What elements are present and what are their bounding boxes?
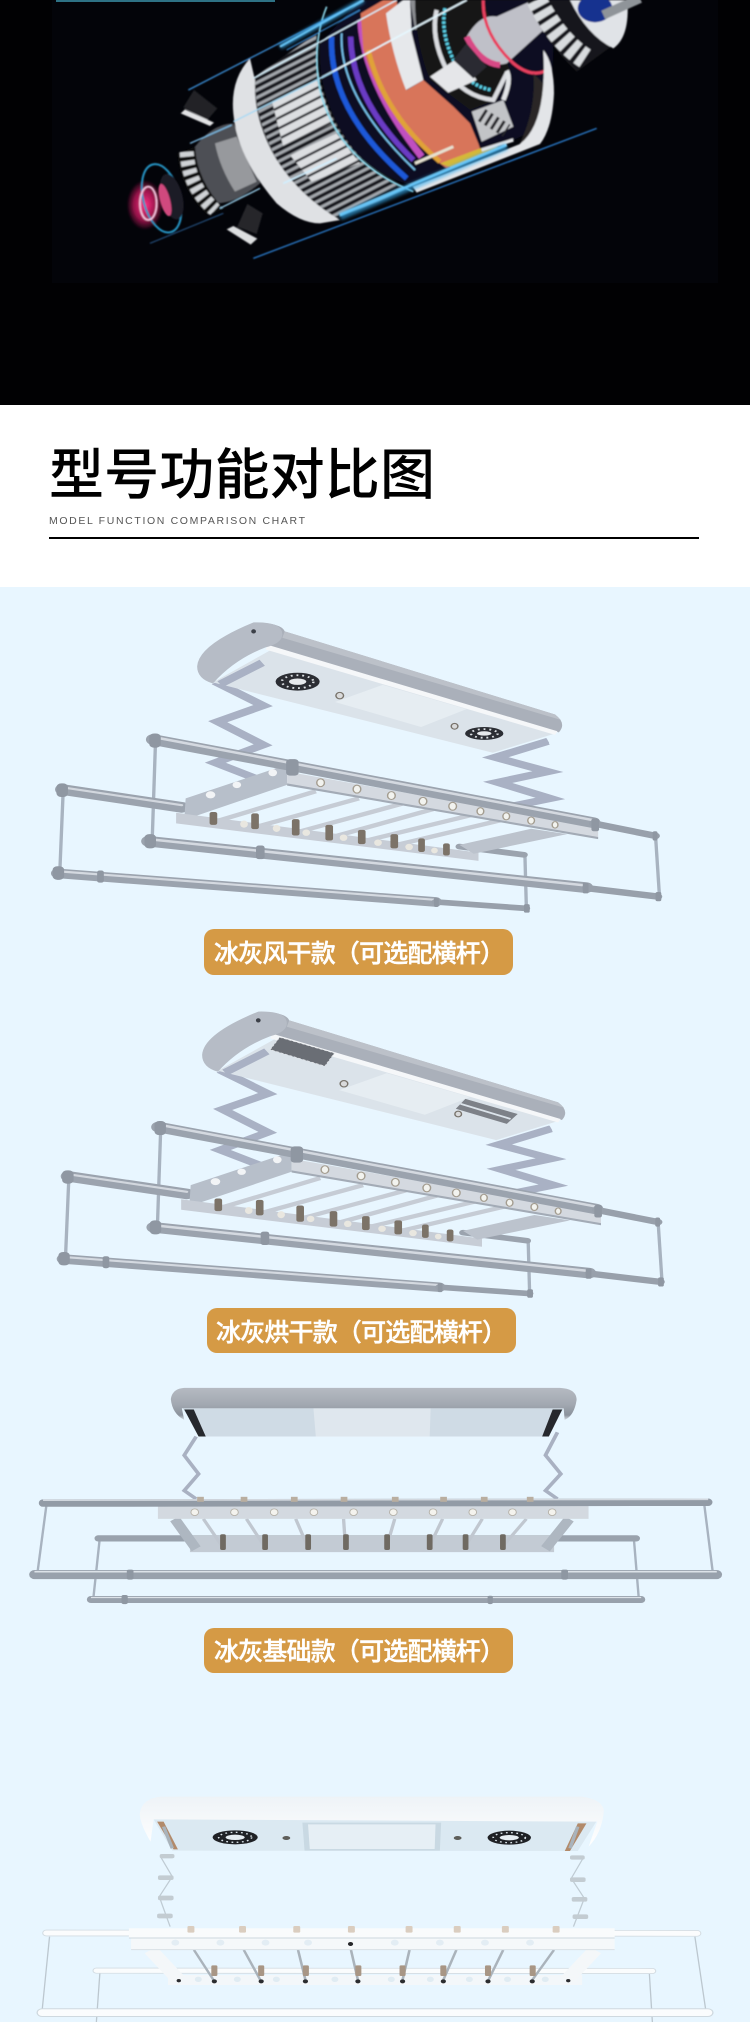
icon: fan vents	[276, 673, 503, 740]
title: 型号功能对比图	[49, 444, 435, 506]
illustration: motor cutaway	[127, 0, 640, 258]
white ring	[233, 58, 340, 223]
right bearing	[527, 0, 627, 72]
orange stator	[361, 0, 482, 168]
inner disc	[415, 0, 510, 110]
label: 冰灰基础款	[204, 1628, 513, 1673]
brackets	[183, 90, 217, 120]
icon: fan vents	[213, 1830, 531, 1845]
panel: motor hero	[0, 0, 750, 405]
cone	[195, 123, 260, 203]
panel: product comparison	[0, 587, 750, 2022]
illustration: white fan-dry rack	[42, 1797, 708, 2022]
heading rule	[49, 537, 699, 539]
light beams	[150, 0, 597, 258]
white block	[386, 0, 423, 90]
subtitle: MODEL FUNCTION COMPARISON CHART	[49, 515, 306, 527]
illustration: ice grey heat-dry rack	[58, 1012, 664, 1298]
icon: heater grilles	[270, 1037, 518, 1124]
drum	[255, 33, 407, 218]
illustration: ice grey basic rack	[34, 1388, 717, 1604]
illustration: ice grey fan-dry rack	[53, 622, 661, 913]
label: 冰灰风干款	[204, 929, 513, 975]
outer rim	[518, 73, 550, 147]
shaft	[467, 0, 543, 64]
heading block	[0, 405, 750, 587]
core interior	[320, 0, 553, 185]
label: 冰灰烘干款	[207, 1308, 516, 1353]
left hub glow	[127, 180, 163, 230]
left bearing	[177, 147, 224, 215]
label: 冰灰风干款: 冰灰风干款（可选配横杆）	[214, 940, 505, 968]
label: 冰灰基础款: 冰灰基础款（可选配横杆）	[214, 1638, 505, 1666]
label: 冰灰烘干款: 冰灰烘干款（可选配横杆）	[216, 1319, 507, 1347]
